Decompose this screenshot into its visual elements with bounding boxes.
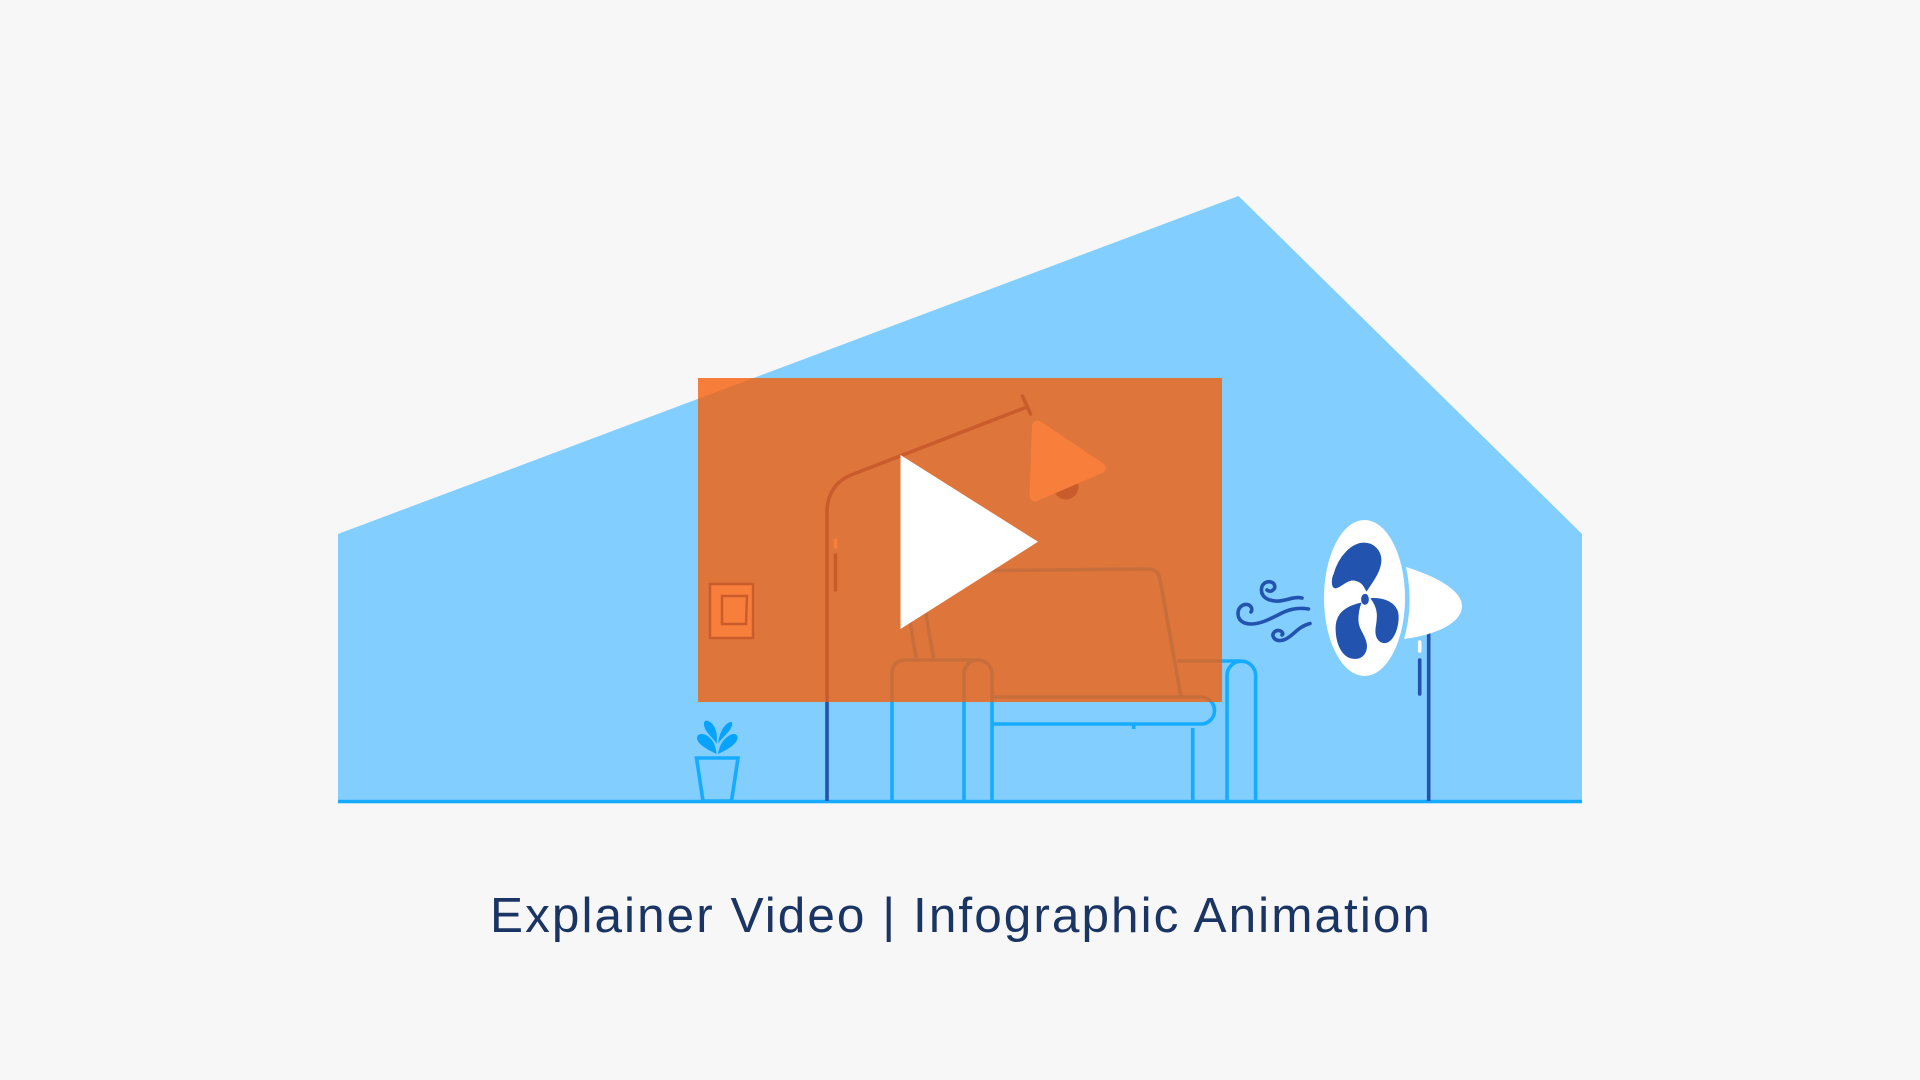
plant leaves bbox=[697, 721, 738, 754]
fan pole bbox=[1427, 633, 1430, 801]
left armrest back bbox=[892, 660, 979, 801]
wind gusts bbox=[1238, 582, 1310, 641]
lamp pole and arm bbox=[827, 407, 1027, 801]
icon: potted plant bbox=[696, 721, 738, 801]
plant pot bbox=[696, 758, 738, 801]
pole shading bbox=[1418, 660, 1421, 694]
right armrest back bbox=[1177, 659, 1241, 663]
pole shading bbox=[834, 555, 837, 590]
lamp bulb bbox=[1054, 474, 1078, 500]
pole highlight bbox=[1418, 642, 1421, 651]
icon: play button bbox=[900, 455, 1038, 629]
seat cushion bbox=[992, 697, 1214, 724]
icon: wall switch bbox=[710, 584, 753, 638]
icon: sofa bbox=[892, 569, 1256, 801]
cushion tick bbox=[1132, 724, 1135, 729]
ground line bbox=[338, 800, 1582, 803]
lamp arm cap bbox=[1022, 396, 1030, 414]
icon: floor lamp bbox=[827, 396, 1100, 801]
fan head bbox=[1324, 520, 1405, 676]
sofa back left edges bbox=[905, 585, 934, 658]
lamp shade bbox=[1035, 426, 1100, 496]
switch rocker bbox=[722, 596, 747, 624]
sofa back bbox=[950, 569, 1181, 697]
video overlay panel bbox=[698, 378, 1222, 702]
icon: standing fan bbox=[1238, 520, 1462, 801]
pole highlight bbox=[834, 540, 837, 547]
fan blades bbox=[1332, 543, 1398, 659]
right armrest front bbox=[1227, 661, 1256, 801]
switch plate bbox=[710, 584, 753, 638]
caption: Explainer Video | Infographic Animation bbox=[490, 888, 1430, 943]
motor housing bbox=[1404, 567, 1462, 639]
left armrest front bbox=[964, 660, 992, 801]
house silhouette bbox=[338, 196, 1582, 802]
front leg bbox=[1191, 728, 1194, 801]
